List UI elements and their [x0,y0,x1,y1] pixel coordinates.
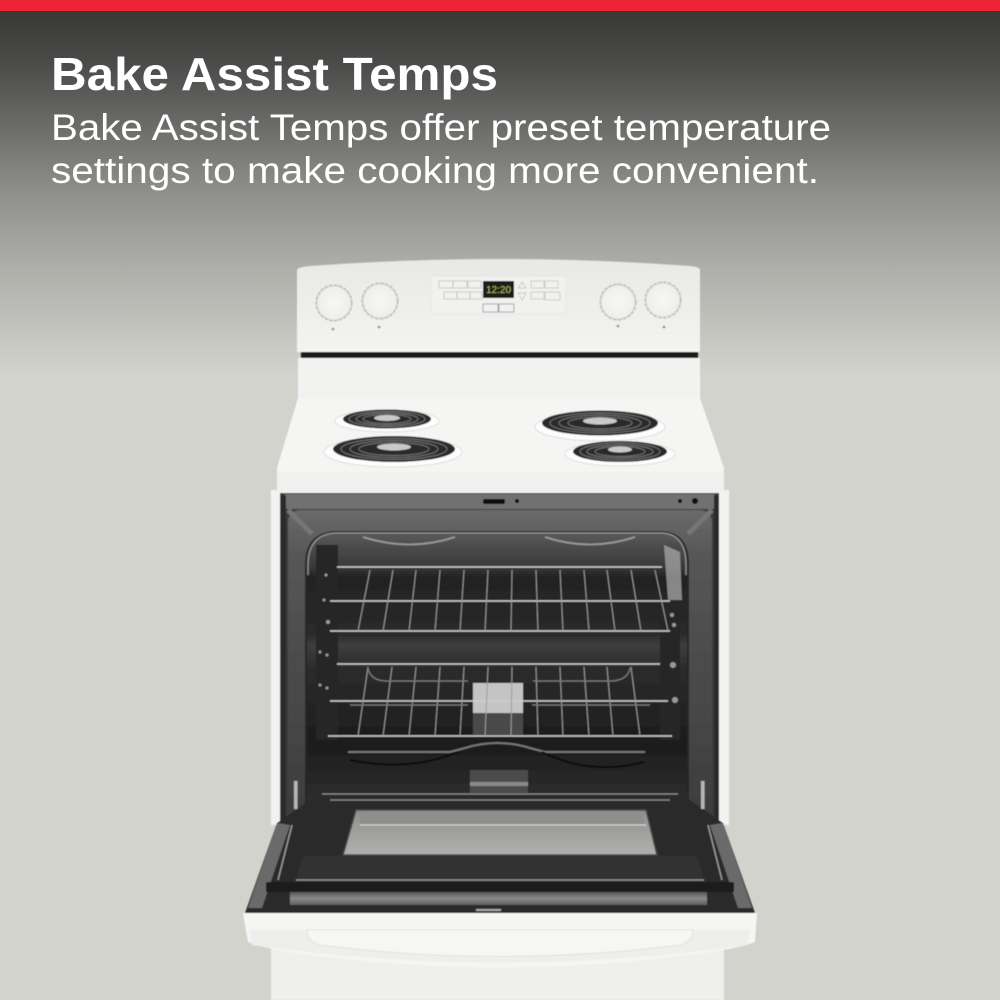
backguard control panel [297,259,700,358]
oven frame [280,493,719,825]
oven cavity [306,532,688,815]
drawer body [271,940,724,1000]
black slot [301,352,698,358]
burner: front left [324,436,462,467]
burner: back left [335,410,439,432]
cooktop [277,358,724,492]
title: Bake Assist Temps [51,48,498,100]
upper oven rack [330,567,670,631]
burner: front right [565,441,675,466]
door hinges [294,781,704,809]
open oven door [245,781,755,913]
lower oven rack [328,664,672,736]
control knobs [316,282,681,330]
bake element [348,743,645,767]
clock display: 12:20 [486,285,511,296]
oven side panels [271,490,729,825]
top red bar [0,0,1000,11]
description text [51,107,831,191]
side rack supports [318,574,678,703]
door handle panel [243,913,757,968]
oven range illustration [243,259,757,1000]
description text: Bake Assist Temps offer preset temperature [51,107,831,148]
burner: back right [535,410,665,441]
door window [343,810,657,855]
oven rear reflections [473,683,523,713]
description text: settings to make cooking more convenient. [51,150,819,191]
control pad [431,276,566,314]
